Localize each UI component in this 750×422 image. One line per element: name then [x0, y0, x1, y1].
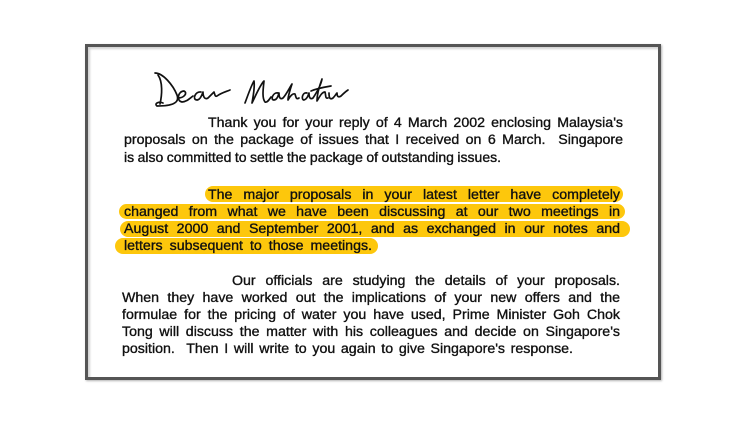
highlighted paragraph: The major proposals in your latest letter have completely — [208, 187, 620, 203]
paragraph 3: Tong will discuss the matter with his colleagues and decide on Singapore's — [122, 324, 620, 340]
highlighted paragraph: August 2000 and September 2001, and as exchanged in our notes and — [124, 221, 620, 237]
paragraph 1: proposals on the package of issues that I received on 6 March. Singapore — [124, 132, 623, 148]
paragraph 3: Our officials are studying the details of your proposals. — [232, 273, 620, 289]
highlighted paragraph: changed from what we have been discussing at our two meetings in — [124, 204, 620, 220]
letter card — [85, 44, 661, 380]
paragraph 3: position. Then I will write to you again to give Singapore's response. — [122, 341, 573, 357]
paragraph 3: When they have worked out the implications of your new offers and the — [122, 290, 620, 306]
highlighted paragraph: letters subsequent to those meetings. — [124, 238, 372, 254]
paragraph 1: Thank you for your reply of 4 March 2002 enclosing Malaysia's — [208, 115, 623, 131]
paragraph 3: formulae for the pricing of water you have used, Prime Minister Goh Chok — [122, 307, 620, 323]
paragraph 1: is also committed to settle the package of outstanding issues. — [124, 149, 501, 165]
paragraph 3 — [122, 273, 620, 357]
paragraph 1 — [124, 115, 623, 166]
highlighted paragraph — [115, 186, 630, 254]
